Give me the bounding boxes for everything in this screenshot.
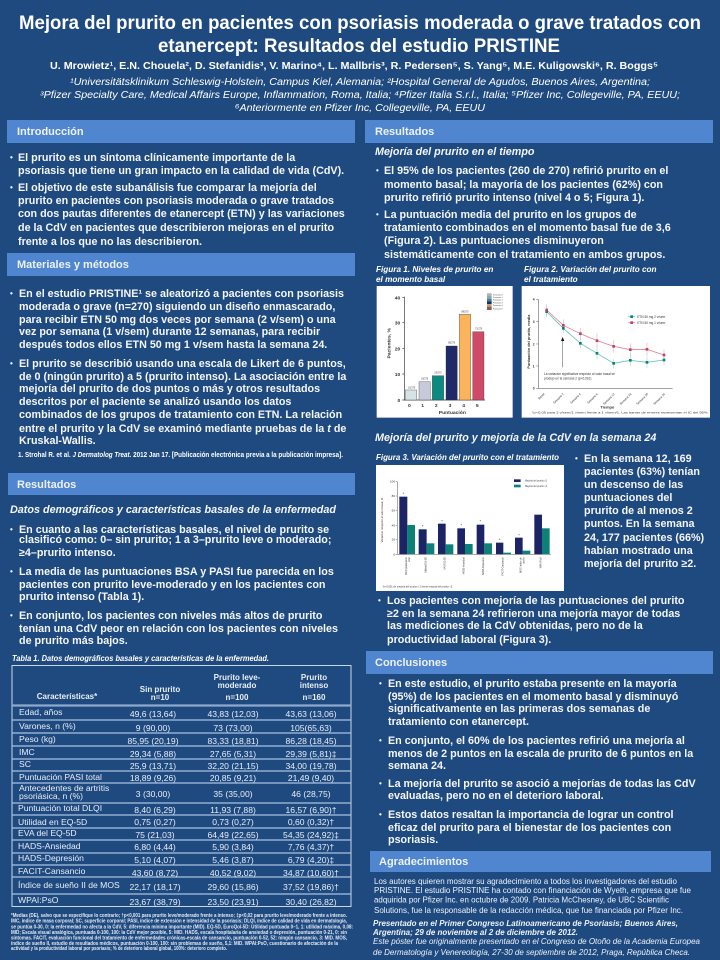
table header: intenso (300, 681, 328, 690)
text block: materiales y métodos: de 0 (ningún prurito) a 5 (prurito intenso). La asociación entre la (19, 371, 347, 383)
bar chart: niveles de prurito: 10 (395, 372, 401, 378)
table rows: Antecedentes de artritis (19, 783, 109, 793)
bar chart: niveles de prurito: 56/270 (448, 343, 456, 345)
text block: productividad: ≥2 en la semana 24 refirieron una mejoría mayor de todas (387, 608, 680, 620)
panel: agradecimientos (370, 851, 711, 957)
heading: conclusiones (366, 651, 713, 674)
heading: resultados: Resultados (17, 479, 76, 491)
text block: conclusiones: eficaz del prurito para el bienestar de los pacientes con (388, 822, 671, 834)
heading: introducción: Introducción (17, 126, 84, 138)
text block: semana 12 y 24: habían mostrado una (584, 545, 694, 557)
text block: conclusiones: • (379, 679, 382, 688)
table footnote: síntomas. FACIT, evaluación funcional del tratamiento de enfermedades crónicas-escala de cansancio, puntuación 0-52, 52: ningún cansancio, 3: MID. MOS, (11, 936, 348, 942)
bar chart: niveles de prurito: Puntuación 4 (493, 304, 503, 307)
figure 3: bar chart: total (408, 557, 411, 562)
text block: agradecimientos: Los autores quieren mostrar su agradecimiento a todos los investigadores del estudio (374, 876, 677, 886)
table rows: Índice de sueño II de MOS (18, 880, 120, 890)
table rows: 29,34 (5,88) (130, 749, 176, 759)
text block: mejoría del prurito en el tiempo: tratamiento combinados en el momento basal fue de 3,6 (384, 222, 671, 234)
line chart: variación del prurito: ETN 50 mg 2 v/sem (637, 315, 666, 319)
text block: conclusiones: evaluadas, pero no en el deterioro laboral. (388, 790, 604, 802)
figure 1 caption: Figura 1. Niveles de prurito en (376, 265, 493, 274)
affiliations: ¹Universitätsklinikum Schleswig-Holstein, Campus Kiel, Alemania; ²Hospital General de Agudos, Buenos Aires, Argentina; (70, 77, 650, 88)
line chart: variación del prurito: 1 (533, 364, 535, 368)
bar chart: niveles de prurito: Puntuación 0 (493, 293, 503, 296)
text block: materiales y métodos: para recibir ETN 50 mg dos veces por semana (2 v/sem) o una (19, 314, 337, 326)
table header: n=160 (303, 693, 326, 702)
bar chart: niveles de prurito: Puntuación 5 (493, 307, 503, 310)
text block: introducción: de la CdV en pacientes que describieron mejoras en el prurito (18, 222, 334, 234)
text block: presentación: Presentado en el Primer Congreso Latinoamericano de Psoriasis; Buenos Aires, (373, 918, 678, 928)
heading: materiales y métodos (7, 253, 355, 276)
table header: Prurito (301, 673, 327, 682)
table rows: 54,35 (24,92)‡ (283, 830, 339, 840)
text block: introducción: psoriasis que tiene un gran impacto en la calidad de vida (CdV). (18, 165, 344, 177)
line chart: variación del prurito: ETN 50 mg 1 v/sem (637, 321, 666, 325)
text block: materiales y métodos: entre el prurito y la CdV se examinó mediante pruebas de la t de (19, 423, 346, 435)
text block: mejoría del prurito en el tiempo: sistemáticamente con el tratamiento en ambos grupos. (384, 249, 665, 261)
panel: materiales y métodos (7, 253, 355, 459)
table footnote: *Medias (DE), salvo que se especifique lo contrario; †p<0,001 para prurito leve/moderado frente a intenso; ‡p<0,02 para prurito leve/moderado frente a intenso. (11, 913, 348, 919)
table rows: 46 (28,75) (291, 789, 331, 799)
line chart: variación del prurito: Semana 4 (569, 392, 582, 405)
table footnote (11, 913, 353, 952)
text block: mejoría del prurito en el tiempo: La puntuación media del prurito en los grupos de (384, 209, 637, 221)
table rows: 37,52 (19,86)† (283, 882, 339, 892)
table rows: EVA del EQ-5D (18, 828, 77, 838)
figure 3: bar chart (376, 465, 564, 591)
table caption: Tabla 1. Datos demográficos basales y características de la enfermedad. (12, 654, 269, 663)
table rows: 86,28 (18,45) (285, 736, 337, 746)
table rows: IMC (19, 747, 35, 757)
text block: semana 12 y 24: prurito de al menos 2 (584, 505, 693, 517)
text block: datos demográficos: pacientes con prurito leve-moderado y en los pacientes con (19, 579, 325, 591)
subheading: mejoría del prurito en el tiempo: Mejoría del prurito en el tiempo (375, 146, 535, 158)
bar chart: niveles de prurito: 71/270 (475, 328, 483, 330)
figure 3: bar chart: Variación respecto al valor basal, % (380, 497, 384, 542)
figure 3: bar chart: HADS-Depresión (482, 557, 485, 575)
table rows: psoriásica, n (%) (19, 791, 83, 801)
text block: semana 12 y 24 (575, 453, 705, 570)
panel: conclusiones (366, 651, 713, 846)
text block: mejoría del prurito en el tiempo: (Figura 2). Las puntuaciones disminuyeron (384, 235, 604, 247)
bar chart: niveles de prurito: 10/270 (408, 387, 416, 389)
bar chart: niveles de prurito: Puntuación 2 (493, 299, 503, 302)
table rows: 34,00 (19,78) (285, 761, 337, 771)
table rows: 43,83 (12,03) (207, 709, 259, 719)
bar chart: niveles de prurito (377, 286, 513, 418)
text block: mejoría del prurito en el tiempo: • (376, 166, 379, 175)
table rows: SC (19, 759, 31, 769)
text block: conclusiones: • (379, 736, 382, 745)
line chart: variación del prurito: Tiempo (600, 404, 615, 409)
table rows: HADS-Ansiedad (18, 841, 81, 851)
text block: materiales y métodos: mejoría del prurito de dos puntos o más y otros resultados (19, 383, 320, 395)
text block: introducción: prurito en pacientes con psoriasis moderada o grave tratados (18, 195, 334, 207)
table rows: 34,87 (10,60)† (283, 868, 339, 878)
panel: introducción (7, 120, 355, 248)
table header: n=100 (226, 693, 249, 702)
text block: mejoría del prurito en el tiempo: momento basal; la mayoría de los pacientes (62%) con (384, 179, 663, 191)
heading: conclusiones: Conclusiones (375, 657, 447, 669)
table 1 (12, 666, 351, 907)
figure 3: bar chart: Mejoría del prurito <2 (525, 485, 548, 488)
figure 3: bar chart: MOS índice de (520, 557, 522, 573)
figure 3: bar chart: * (403, 491, 405, 496)
line chart: variación del prurito: 2 (533, 342, 535, 346)
text block: conclusiones: tratamiento con etanercept. (388, 716, 529, 728)
table header: Sin prurito (140, 685, 180, 694)
heading: agradecimientos (370, 851, 711, 872)
text block: conclusiones: semana 24. (388, 760, 446, 772)
table header (37, 673, 328, 702)
text block: introducción: • (10, 153, 13, 162)
text block: semana 12 y 24: puntuaciones del (584, 492, 672, 504)
text block: conclusiones: (95%) de los pacientes en el momento basal y disminuyó (388, 691, 679, 703)
table rows: 83,33 (18,81) (207, 736, 259, 746)
bar chart: niveles de prurito: Puntuación (439, 410, 466, 416)
text block: presentación: Argentina; 29 de noviembre al 2 de diciembre de 2012. (372, 927, 578, 937)
text block: conclusiones: psoriasis. (388, 834, 438, 846)
table rows: 75 (21,03) (135, 830, 175, 840)
text block: productividad: productividad laboral (Figura 3). (387, 634, 551, 646)
text block: materiales y métodos: Kruskal-Wallis. (19, 435, 96, 447)
text block: presentación: Este póster fue originalmente presentado en el Congreso de Otoño de la Academia Europea (373, 936, 700, 946)
table header: n=10 (151, 693, 170, 702)
title: Mejora del prurito en pacientes con psoriasis moderada o grave tratados con (19, 13, 701, 34)
table rows: Puntuación PASI total (19, 772, 102, 782)
table rows: 49,6 (13,64) (130, 709, 176, 719)
text block: semana 12 y 24: pacientes (63%) tenían (584, 466, 700, 478)
text block: mejoría del prurito en el tiempo: El 95% de los pacientes (260 de 270) refirió prurito en el (384, 165, 668, 177)
bar chart: niveles de prurito: 20 (395, 346, 401, 352)
figure 3: bar chart: Mejoría del prurito ≥2 (525, 480, 548, 483)
table rows: 22,17 (18,17) (129, 882, 181, 892)
text block: conclusiones: significativamente en las primeras dos semanas de (388, 703, 650, 715)
text block: datos demográficos: ≥4–prurito intenso. (19, 547, 116, 559)
table rows: 5,10 (4,07) (134, 855, 176, 865)
table rows: 6,80 (4,44) (134, 842, 176, 852)
table rows: 7,76 (4,37)† (288, 842, 334, 852)
authors: U. Mrowietz¹, E.N. Chouela², D. Stefanidis³, V. Marino⁴, L. Mallbris³, R. Pedersen⁵, S. Yang⁵, M.E. Kuligowski⁶, R. Boggs⁵ (50, 61, 658, 72)
table rows: 18,89 (9,26) (130, 773, 176, 783)
table rows: 11,93 (7,88) (210, 805, 256, 815)
bar chart: niveles de prurito: 0 (408, 403, 411, 409)
figure 1 caption: el momento basal (376, 275, 446, 284)
table footnote: IMC, índice de masa corporal; SC, superficie corporal; PASI, índice de extensión e intensidad de la psoriasis; DLQI, índice de calidad de vida en dermatología, (11, 918, 348, 924)
text block: agradecimientos: Solutions, fue la responsable de la redacción médica, que fue financiada por Pfizer Inc. (374, 905, 683, 915)
figure 3: bar chart: WPAI:PsO (540, 557, 543, 568)
figure 2 caption (524, 265, 657, 284)
figure 3 caption: Figura 3. Variación del prurito con el tratamiento (376, 453, 559, 462)
bar chart: niveles de prurito: 0 (398, 398, 401, 404)
line chart: variación del prurito: Puntuación del prurito, media (527, 314, 531, 369)
table rows: 8,40 (6,29) (134, 805, 176, 815)
text block: agradecimientos: PRISTINE. El estudio PRISTINE ha contado con financiación de Wyeth, empresa que fue (374, 885, 691, 895)
text block: materiales y métodos: moderada o grave (n=270) siguiendo un diseño enmascarado, (19, 301, 335, 313)
text block: conclusiones: • (379, 779, 382, 788)
line chart: variación del prurito: Semana 12 (602, 392, 616, 406)
bar chart: niveles de prurito: 30 (395, 321, 401, 327)
bar chart: niveles de prurito: 89/270 (461, 311, 469, 313)
table rows: 25,9 (13,71) (130, 761, 176, 771)
table rows: 3 (30,00) (136, 789, 170, 799)
table rows: 5,46 (3,87) (212, 855, 254, 865)
text block: introducción: • (10, 183, 13, 192)
text block: materiales y métodos: vez por semana (1 v/sem) durante 12 semanas, para recibir (19, 326, 321, 338)
table rows: HADS-Depresión (18, 853, 84, 863)
table header: Características* (37, 692, 98, 701)
table rows: 6,79 (4,20)‡ (288, 855, 334, 865)
table rows: 105(65,63) (290, 723, 332, 733)
heading: resultados (365, 120, 713, 143)
text block: productividad: las mediciones de la CdV obtenidas, pero no de la (387, 620, 644, 632)
text block: materiales y métodos: descritos por el paciente se analizó usando los datos (19, 396, 291, 408)
line chart: variación del prurito: Semana 2 (552, 392, 565, 405)
text block: conclusiones: En conjunto, el 60% de los pacientes refirió una mejoría al (388, 735, 685, 747)
text block: productividad: • (378, 596, 381, 605)
table header: Prurito leve- (214, 673, 261, 682)
text block: materiales y métodos: • (10, 289, 13, 298)
text block: datos demográficos: • (10, 611, 13, 620)
text block: mejoría del prurito en el tiempo: prurito refirió prurito intenso (nivel 4 o 5; Figura 1). (384, 192, 644, 204)
line chart: variación del prurito: Semana 8 (586, 392, 599, 405)
table footnote: actividad y la productividad laboral por psoriasis; % de deterioro laboral global, 100%: deterioro completo. (11, 946, 228, 952)
text block: datos demográficos: En conjunto, los pacientes con niveles más altos de prurito (19, 610, 323, 622)
table rows: WPAI:PsO (18, 895, 59, 905)
table rows: 21,49 (9,40) (288, 773, 334, 783)
table rows: 43,63 (13,06) (285, 709, 337, 719)
table rows: 64,49 (22,65) (207, 830, 259, 840)
text block: materiales y métodos: • (10, 359, 13, 368)
text block: introducción: El prurito es un síntoma clínicamente importante de la (18, 152, 296, 164)
text block: conclusiones: Estos datos resaltan la importancia de lograr un control (388, 809, 674, 821)
figure 3: bar chart: * (461, 523, 463, 528)
text block: conclusiones: La mejoría del prurito se asoció a mejorías de todas las CdV (388, 778, 697, 790)
text block: agradecimientos (374, 876, 691, 915)
table rows: 85,95 (20,19) (127, 736, 179, 746)
table rows: 35 (35,00) (213, 789, 253, 799)
heading: resultados: Resultados (375, 126, 434, 138)
table rows: Utilidad en EQ-5D (18, 817, 87, 827)
table rows: 29,60 (15,86) (207, 882, 259, 892)
figure 3: bar chart: VAS EQ-5D (443, 557, 446, 570)
table rows: 0,73 (0,27) (212, 817, 254, 827)
figure 3: bar chart: 20 (392, 538, 395, 542)
text block: semana 12 y 24: mejoría del prurito ≥2. (584, 558, 696, 570)
bar chart: niveles de prurito: 25/270 (434, 372, 442, 374)
text block: datos demográficos: En cuanto a las características basales, el nivel de prurito se (19, 524, 329, 536)
table rows (18, 707, 339, 907)
text block: productividad (378, 595, 685, 646)
table rows: 27,65 (5,31) (210, 749, 256, 759)
table rows: 0,60 (0,32)† (288, 817, 334, 827)
table footnote: MID; Escala visual analógica, puntuada 0-100, 100: la CdV mejor posible, 5: MID. HADS, escala hospitalaria de ansiedad o depresión, puntuación 0-21, 0: sin (11, 930, 347, 936)
bar chart: niveles de prurito: Puntuación 3 (493, 301, 503, 304)
line chart: variación del prurito: *p<0,05 para 2 v/sem/1 v/sem frente a 1 v/sem/1. Las barras de errores representan el IC del 95%. (532, 411, 709, 415)
table rows: 20,85 (9,21) (210, 773, 256, 783)
figure 3: bar chart: Utilidad EQ-5D (425, 557, 428, 573)
figure 3: bar chart: 60 (392, 509, 395, 513)
text block: presentación (372, 918, 700, 957)
line chart: variación del prurito: produjo en la semana 2 (p<0,001) (544, 376, 591, 380)
text block: datos demográficos: prurito intenso (Tabla 1). (19, 591, 144, 603)
figure 3: bar chart: *p<0,001 de mejoría del prurito ≥ 2 frente mejoría del prurito <2. (383, 585, 453, 588)
table header: moderado (218, 681, 256, 690)
heading: materiales y métodos: Materiales y métodos (17, 259, 129, 271)
figure 3: bar chart: * (441, 518, 443, 523)
table footnote: índice de sueño II, estudio de resultados médicos, puntuación 0-100, 100: sin problemas de sueño, 5,1: MID. WPAI:PsO, cuestionario de afectación de la (11, 941, 338, 947)
line chart: variación del prurito: Basal (537, 392, 546, 400)
figure 3: bar chart: * (480, 519, 482, 524)
heading: resultados (8, 473, 355, 495)
text block: datos demográficos (10, 524, 338, 647)
bar chart: niveles de prurito: Pacientes, % (387, 328, 393, 359)
table rows: Edad, años (19, 707, 62, 717)
text block: productividad: Los pacientes con mejoría de las puntuaciones del prurito (387, 595, 685, 607)
reference: 1. Strohal R. et al. J Dermatolog Treat. 2012 Jan 17. [Publicación electrónica previa a la publicación impresa]. (18, 452, 343, 459)
bar chart: niveles de prurito: 5 (476, 403, 479, 409)
affiliations: ⁶Anteriormente en Pfizer Inc, Collegeville, PA, EEUU (235, 103, 486, 114)
table footnote: se puntúa 0-30, 0: la enfermedad no afecta a la CdV, 5: diferencia mínima importante (MID). EQ-5D, EuroQol-5D: Utilidad puntuada 0–1, 1: utilidad máxima, 0,08: (11, 924, 353, 930)
line chart: variación del prurito: 3 (533, 320, 535, 324)
subheading: datos demográficos: Datos demográficos y características basales de la enfermedad (10, 504, 336, 516)
table rows: 9 (90,00) (136, 723, 170, 733)
table rows: 40,52 (9,02) (210, 868, 256, 878)
text block: datos demográficos: La media de las puntuaciones BSA y PASI fue parecida en los (19, 566, 334, 578)
line chart: variación del prurito: La variación significativa respecto al valor basal se (544, 372, 615, 376)
text block: datos demográficos: clasificó como: 0– sin prurito; 1 a 3–prurito leve o moderado; (19, 534, 331, 546)
figure 2: line chart (522, 265, 710, 418)
bar chart: niveles de prurito: 2 (435, 403, 438, 409)
table rows: 23,50 (23,91) (207, 897, 259, 907)
text block: materiales y métodos: En el estudio PRISTINE¹ se aleatorizó a pacientes con psoriasis (19, 288, 344, 300)
text block: materiales y métodos: El prurito se describió usando una escala de Likert de 6 puntos, (19, 358, 346, 370)
figure 3: bar chart: * (499, 537, 501, 542)
text block: semana 12 y 24: un descenso de las (584, 479, 683, 491)
figure 1 caption (376, 265, 493, 284)
text block: conclusiones: menos de 2 puntos en la escala de prurito de 6 puntos en la (388, 748, 694, 760)
bar chart: niveles de prurito: 1 (421, 403, 424, 409)
bar chart: niveles de prurito: 19/270 (421, 378, 429, 380)
text block: mejoría del prurito en el tiempo: • (376, 210, 379, 219)
affiliations (40, 77, 680, 114)
figure 3: bar chart: 80 (392, 494, 395, 498)
table rows: 0,75 (0,27) (134, 817, 176, 827)
bar chart: niveles de prurito: 3 (449, 403, 452, 409)
text block: datos demográficos: • (10, 567, 13, 576)
figure 1: bar chart (376, 265, 513, 418)
figure 3: bar chart: 0 (393, 552, 395, 556)
figure 3: bar chart: DLQI puntuación (405, 557, 408, 575)
table rows: Peso (kg) (19, 734, 56, 744)
title (19, 13, 701, 57)
table rows: 29,39 (5,81)‡ (285, 749, 337, 759)
bar chart: niveles de prurito: 4 (462, 403, 465, 409)
subheading: semana 24: Mejoría del prurito y mejoría de la CdV en la semana 24 (375, 432, 656, 444)
table rows: 32,20 (21,15) (207, 761, 259, 771)
table rows: 23,67 (38,79) (129, 897, 181, 907)
figure 3: bar chart: HADS-Ansiedad (463, 557, 466, 574)
line chart: variación del prurito: Semana 20 (635, 392, 649, 406)
title: etanercept: Resultados del estudio PRISTINE (158, 36, 560, 57)
line chart: variación del prurito: 0 (533, 387, 535, 391)
figure 3: bar chart: * (422, 524, 424, 529)
line chart: variación del prurito (522, 286, 710, 418)
figure 3: bar chart: sueño (522, 557, 525, 564)
figure 3: bar chart: FACIT-Cansancio (501, 557, 504, 576)
table rows: 16,57 (6,90)† (285, 805, 337, 815)
text block: presentación: de Dermatología y Venereología, 27-30 de septiembre de 2012, Praga, República Checa. (373, 947, 690, 957)
text block: conclusiones (379, 678, 697, 846)
table rows: Varones, n (%) (19, 721, 76, 731)
text block: materiales y métodos: combinados de los grupos de tratamiento con ETN. La relación (19, 409, 342, 421)
table rows: 43,60 (8,72) (132, 868, 178, 878)
text block: semana 12 y 24: puntos. En la semana (584, 518, 696, 530)
heading: agradecimientos: Agradecimientos (379, 856, 468, 868)
text block: mejoría del prurito en el tiempo (376, 165, 671, 261)
text block: conclusiones: • (379, 810, 382, 819)
table rows: 5,90 (3,84) (212, 842, 254, 852)
panel: resultados izquierda (8, 473, 355, 647)
figure 3: bar chart: * (518, 532, 520, 537)
text block: materiales y métodos (10, 288, 347, 447)
text block: agradecimientos: adquirida por Pfizer Inc. en octubre de 2009. Patricia McChesney, de UBC Scientific (374, 894, 670, 904)
bar chart: niveles de prurito: Puntuación 1 (493, 296, 503, 299)
text block: introducción (10, 152, 345, 248)
text block: datos demográficos: tenían una CdV peor en relación con los pacientes con niveles (19, 623, 338, 635)
text block: introducción: con dos pautas diferentes de etanercept (ETN) y las variaciones (18, 208, 345, 220)
text block: datos demográficos: de prurito más bajos. (19, 635, 128, 647)
figure 2 caption: Figura 2. Variación del prurito con (524, 265, 657, 274)
bar chart: niveles de prurito: 40 (395, 295, 401, 301)
table rows: 30,40 (26,82) (285, 897, 337, 907)
text block: introducción: frente a los que no las describieron. (18, 236, 202, 248)
figure 3: bar chart: 100 (390, 480, 395, 484)
table rows: FACIT-Cansancio (18, 866, 86, 876)
table rows: Puntuación total DLQI (18, 803, 102, 813)
affiliations: ³Pfizer Specialty Care, Medical Affairs Europe, Inflammation, Roma, Italia; ⁴Pfizer Italia S.r.l., Italia; ⁵Pfizer Inc, Collegeville, PA, EEUU; (40, 90, 680, 101)
text block: datos demográficos: • (10, 525, 13, 534)
text block: introducción: El objetivo de este subanálisis fue comparar la mejoría del (18, 182, 317, 194)
table rows: 73 (73,00) (213, 723, 253, 733)
text block: semana 12 y 24: • (575, 454, 578, 463)
text block: semana 12 y 24: En la semana 12, 169 (584, 453, 692, 465)
line chart: variación del prurito: Semana 16 (619, 392, 633, 406)
heading: introducción (7, 120, 355, 143)
text block: conclusiones: En este estudio, el prurito estaba presente en la mayoría (388, 678, 678, 690)
figure 2 caption: el tratamiento (524, 275, 578, 284)
figure 3: bar chart: 40 (392, 523, 395, 527)
line chart: variación del prurito: 4 (533, 298, 535, 302)
panel: resultados derecha (365, 120, 713, 261)
text block: semana 12 y 24: 24, 177 pacientes (66%) (584, 532, 705, 544)
text block: materiales y métodos: después todos ellos ETN 50 mg 1 v/sem hasta la semana 24. (19, 339, 327, 351)
line chart: variación del prurito: Semana 24 (652, 392, 666, 406)
